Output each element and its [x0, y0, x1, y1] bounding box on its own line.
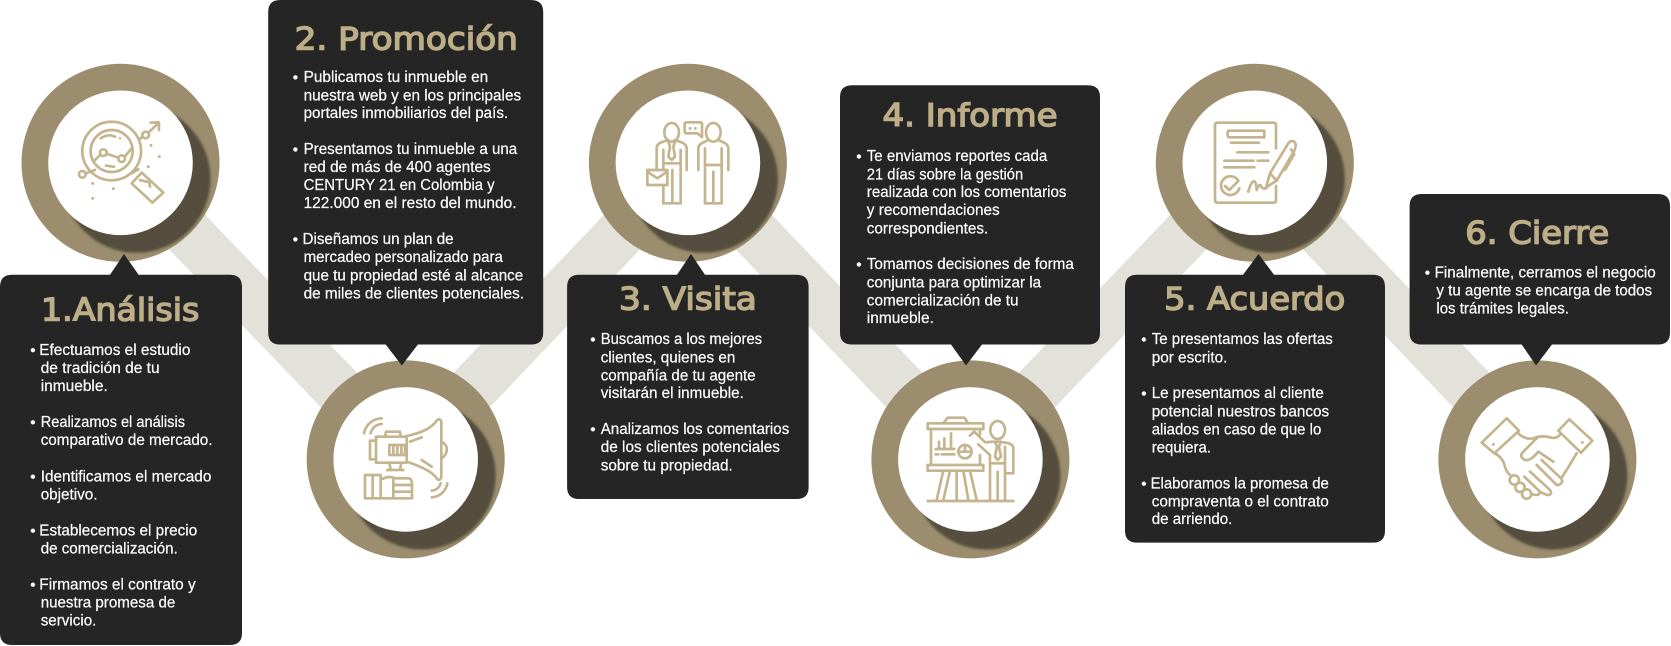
- text block: step 4 bullets: comercialización de tu: [867, 292, 1019, 310]
- text block: step 1 bullets: inmueble.: [41, 378, 108, 395]
- text block: step 2 bullets: Presentamos tu inmueble a una: [304, 141, 518, 158]
- text block: step 1 bullets: Realizamos el análisis: [41, 414, 185, 431]
- text block: step 3 bullets: clientes, quienes en: [601, 349, 735, 366]
- text block: step 5 bullets: de arriendo.: [1152, 511, 1232, 528]
- zigzag connector band: [120, 163, 1537, 459]
- step 1 circle with icon: [22, 64, 220, 262]
- text block: step 1 bullets: Firmamos el contrato y: [39, 576, 196, 593]
- text block: step 5 bullets: compraventa o el contrato: [1152, 494, 1329, 510]
- text block: step 4 bullets: correspondientes.: [867, 220, 988, 237]
- text block: step 1 bullets: Identificamos el mercado: [41, 468, 211, 485]
- panel: 1. Análisis: [0, 254, 242, 645]
- text block: step 3 bullets: compañía de tu agente: [601, 368, 756, 384]
- heading: 3. Visita: 3. Visita: [619, 281, 757, 317]
- step 4 circle with icon: [871, 360, 1069, 558]
- text block: step 1 bullets: comparativo de mercado.: [41, 432, 213, 449]
- text block: step 1 bullets: [31, 342, 212, 630]
- text block: step 1 bullets: objetivo.: [41, 486, 98, 504]
- text block: step 5 bullets: requiera.: [1152, 440, 1211, 456]
- text block: step 1 bullets: Establecemos el precio: [39, 522, 197, 539]
- text block: step 1 bullets: servicio.: [41, 613, 96, 630]
- text block: step 5 bullets: aliados en caso de que lo: [1152, 421, 1321, 438]
- text block: step 5 bullets: Le presentamos al cliente: [1152, 385, 1324, 402]
- text block: step 6 bullets: los trámites legales.: [1436, 300, 1569, 317]
- panel: 2. Promoción: [268, 0, 543, 366]
- text block: step 2 bullets: Diseñamos un plan de: [302, 231, 454, 248]
- text block: step 3 bullets: Analizamos los comentarios: [601, 421, 790, 438]
- step 3 circle with icon: [589, 64, 787, 262]
- icon: handshake: [1482, 418, 1592, 499]
- step 5 circle with icon: [1156, 64, 1354, 262]
- icon: two people talking: [647, 122, 728, 203]
- text block: step 3 bullets: [591, 331, 790, 474]
- heading: 5. Acuerdo: 5. Acuerdo: [1164, 281, 1345, 317]
- text block: step 2 bullets: red de más de 400 agentes: [304, 159, 491, 176]
- text block: step 4 bullets: [857, 148, 1074, 327]
- text block: step 4 bullets: 21 días sobre la gestión: [867, 166, 1023, 183]
- text block: step 3 bullets: Buscamos a los mejores: [601, 331, 762, 348]
- panel: 3. Visita: [567, 254, 809, 499]
- text block: step 4 bullets: y recomendaciones: [867, 202, 1000, 219]
- text block: step 2 bullets: CENTURY 21 en Colombia y: [304, 177, 495, 194]
- text block: step 5 bullets: [1142, 331, 1333, 528]
- icon: magnifying glass with chart: [79, 122, 163, 203]
- icon: presenter at easel: [928, 418, 1013, 501]
- icon: signed contract and pen: [1215, 123, 1296, 203]
- text block: step 5 bullets: por escrito.: [1152, 349, 1227, 366]
- text block: step 2 bullets: nuestra web y en los principales: [304, 87, 521, 104]
- text block: step 5 bullets: Elaboramos la promesa de: [1151, 475, 1329, 492]
- panel: 4. Informe: [840, 85, 1100, 366]
- panel: 5. Acuerdo: [1125, 254, 1385, 543]
- text block: step 6 bullets: y tu agente se encarga de todos: [1436, 282, 1652, 300]
- text block: step 1 bullets: de comercialización.: [41, 540, 178, 558]
- panel: 6. Cierre: [1410, 194, 1670, 366]
- step 6 circle with icon: [1438, 360, 1636, 558]
- heading: 2. Promoción: 2. Promoción: [295, 21, 518, 57]
- text block: step 3 bullets: sobre tu propiedad.: [601, 457, 733, 474]
- text block: step 4 bullets: Te enviamos reportes cada: [867, 148, 1048, 165]
- text block: step 4 bullets: realizada con los comentarios: [867, 184, 1067, 201]
- text block: step 2 bullets: mercadeo personalizado para: [304, 249, 503, 266]
- text block: step 1 bullets: Efectuamos el estudio: [39, 342, 190, 359]
- text block: step 5 bullets: potencial nuestros bancos: [1152, 403, 1329, 420]
- text block: step 4 bullets: conjunta para optimizar la: [867, 274, 1041, 291]
- text block: step 2 bullets: portales inmobiliarios del país.: [304, 105, 508, 122]
- text block: step 2 bullets: 122.000 en el resto del mundo.: [304, 195, 516, 212]
- text block: step 2 bullets: [293, 69, 524, 302]
- heading: 1.Análisis: 1.Análisis: [41, 293, 199, 329]
- text block: step 2 bullets: que tu propiedad esté al alcance: [304, 267, 523, 284]
- heading: 6. Cierre: 6. Cierre: [1465, 216, 1609, 252]
- text block: step 6 bullets: [1425, 264, 1656, 317]
- text block: step 5 bullets: Te presentamos las ofertas: [1152, 331, 1333, 348]
- icon: megaphone held by hand: [364, 418, 447, 498]
- text block: step 1 bullets: de tradición de tu: [41, 360, 160, 377]
- text block: step 3 bullets: de los clientes potenciales: [601, 439, 780, 456]
- step 2 circle with icon: [307, 360, 505, 558]
- heading: 4. Informe: 4. Informe: [882, 98, 1058, 134]
- text block: step 1 bullets: nuestra promesa de: [41, 594, 175, 612]
- text block: step 3 bullets: visitarán el inmueble.: [601, 385, 744, 402]
- text block: step 4 bullets: inmueble.: [867, 310, 934, 327]
- text block: step 2 bullets: Publicamos tu inmueble en: [304, 69, 488, 86]
- text block: step 4 bullets: Tomamos decisiones de forma: [867, 256, 1074, 273]
- text block: step 2 bullets: de miles de clientes potenciales.: [304, 286, 524, 302]
- text block: step 6 bullets: Finalmente, cerramos el negocio: [1435, 264, 1656, 281]
